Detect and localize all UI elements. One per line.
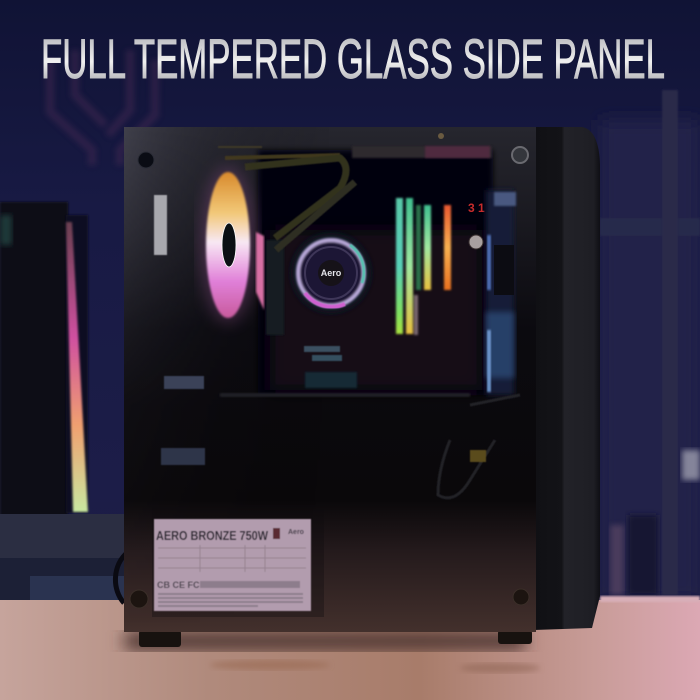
- PSU label: [154, 519, 311, 611]
- PC case: [124, 127, 600, 647]
- interior: motherboard: [161, 146, 493, 465]
- interior: debug display: 3 1: [468, 201, 485, 215]
- glass screws: [130, 133, 529, 608]
- side shelf: [0, 514, 126, 602]
- interior: CPU cooler: [291, 233, 371, 313]
- PSU label: CB CE FC: [157, 580, 200, 590]
- case feet: [139, 630, 532, 647]
- interior: PSU shroud cable: [438, 395, 520, 498]
- tempered glass panel: [124, 127, 536, 632]
- interior: rear fan RGB: [200, 167, 264, 323]
- interior: sleeved cables: [218, 147, 355, 250]
- left RGB tower: [0, 202, 88, 524]
- interior: RGB RAM modules: [396, 198, 451, 335]
- barcode sticker: [154, 195, 167, 255]
- PSU label: Aero: [288, 529, 304, 536]
- cable behind case: [115, 552, 128, 603]
- PSU outline: [152, 505, 324, 617]
- interior: rear blue LED fan: [486, 190, 516, 395]
- PSU label: AERO BRONZE 750W: [156, 528, 269, 543]
- interior: CPU cooler: Aero: [321, 268, 342, 278]
- wooden desk: [0, 596, 700, 700]
- neon logo on wall: [50, 50, 155, 165]
- case front panel: [534, 127, 600, 630]
